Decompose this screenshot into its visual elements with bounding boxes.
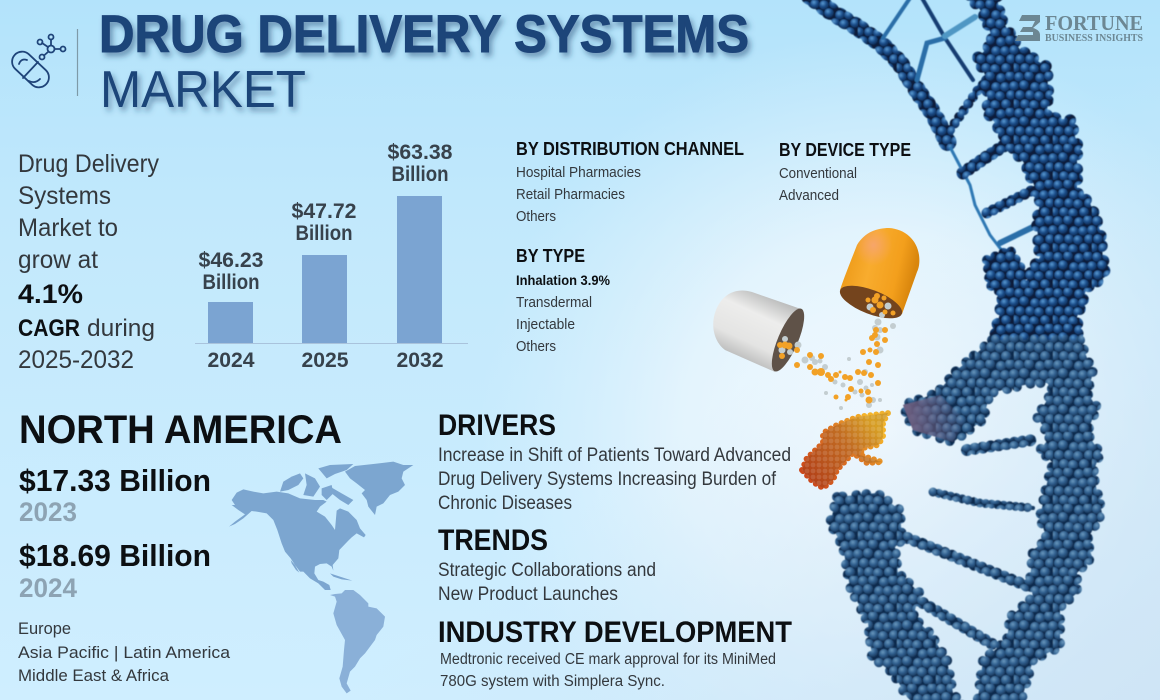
panel: by distribution channel: Retail Pharmacies (516, 187, 625, 203)
panel: North America stats (19, 408, 342, 603)
panel: North America stats: NORTH AMERICA (19, 408, 342, 452)
panel: industry development: Medtronic received CE mark approval for its MiniMed (440, 651, 776, 668)
upper main DNA strand (970, 0, 1105, 350)
panel: drivers: Drug Delivery Systems Increasing Burden of (438, 469, 777, 490)
title: DRUG DELIVERY SYSTEMS (99, 5, 749, 64)
text: CAGR statement: Drug Delivery (18, 150, 159, 178)
bar 2032: Billion (392, 163, 448, 186)
panel: by type (516, 246, 610, 355)
gray granules (778, 302, 896, 410)
upper thin DNA strand (810, 0, 1003, 252)
logo: Fortune Business Insights: BUSINESS INSIGHTS (1045, 33, 1143, 44)
map: the Americas (229, 462, 413, 693)
panel: North America stats: $18.69 Billion (19, 538, 211, 573)
bar 2024: 2024 (208, 349, 255, 372)
bar 2025: $47.72 (292, 200, 356, 223)
panel: industry development: 780G system with Simplera Sync. (440, 673, 665, 690)
header divider (76, 29, 78, 96)
panel: by type: Others (516, 339, 556, 355)
panel: by distribution channel: Hospital Pharmacies (516, 165, 641, 181)
bar 2025: Billion (296, 222, 352, 245)
icon: capsule with molecule (8, 34, 66, 91)
panel: trends: Strategic Collaborations and (438, 560, 656, 581)
bar 2025 (292, 200, 356, 372)
orange spill cluster (802, 413, 888, 488)
text: CAGR statement: Systems (18, 182, 111, 210)
lower left DNA strand (830, 493, 962, 700)
text: CAGR statement: grow at (18, 246, 98, 274)
text: CAGR statement: during (87, 315, 155, 342)
bar 2025: 2025 (302, 349, 349, 372)
logo: Fortune Business Insights: FORTUNE (1045, 11, 1143, 35)
orange capsule half (836, 228, 919, 325)
logo: Fortune Business Insights (1015, 11, 1143, 44)
text: CAGR statement: Market to (18, 214, 118, 242)
bar 2024 (198, 249, 264, 372)
lower DNA rungs (900, 440, 1033, 647)
title (99, 5, 749, 119)
panel: drivers: DRIVERS (438, 409, 556, 442)
text: other regions (18, 619, 231, 685)
illustration: open capsule spilling granules (713, 228, 919, 488)
upper DNA rungs (883, 0, 1033, 243)
text: CAGR statement: CAGR (18, 315, 80, 342)
panel: North America stats: 2024 (19, 573, 77, 603)
panel: by distribution channel: BY DISTRIBUTION CHANNEL (516, 139, 744, 159)
bar 2024: Billion (202, 271, 260, 294)
bar 2032 (388, 141, 453, 372)
title: MARKET (100, 61, 306, 119)
panel: by device type (779, 140, 911, 204)
text: other regions: Middle East & Africa (18, 666, 170, 685)
bar 2024: $46.23 (198, 249, 264, 272)
bar chart: market size (195, 141, 468, 372)
panel: by device type: BY DEVICE TYPE (779, 140, 911, 160)
text: CAGR statement: 4.1% (18, 279, 83, 309)
text: other regions: Europe (18, 619, 71, 638)
panel: industry development: INDUSTRY DEVELOPMENT (438, 616, 792, 649)
panel: industry development (438, 616, 792, 690)
panel: trends: New Product Launches (438, 584, 618, 605)
panel: trends (438, 524, 656, 605)
text: CAGR statement (18, 150, 159, 374)
panel: drivers (438, 409, 791, 514)
panel: by type: Inhalation 3.9% (516, 272, 610, 288)
silver capsule half (713, 291, 810, 375)
panel: by device type: Advanced (779, 188, 839, 204)
panel: drivers: Increase in Shift of Patients Toward Advanced (438, 445, 791, 466)
panel: by type: BY TYPE (516, 246, 585, 266)
panel: by type: Transdermal (516, 295, 592, 311)
panel: by type: Injectable (516, 317, 575, 333)
panel: by distribution channel (516, 139, 744, 225)
orange granules (777, 293, 896, 404)
panel: North America stats: $17.33 Billion (19, 463, 211, 498)
lower main DNA strand (903, 340, 1102, 700)
text: other regions: Asia Pacific | Latin America (18, 643, 231, 662)
panel: by distribution channel: Others (516, 209, 556, 225)
illustration: DNA double helix (810, 0, 1105, 700)
panel: drivers: Chronic Diseases (438, 493, 572, 514)
text: CAGR statement: 2025-2032 (18, 346, 134, 374)
bar 2032: $63.38 (388, 141, 453, 164)
bar 2032: 2032 (396, 349, 444, 372)
panel: trends: TRENDS (438, 524, 548, 557)
panel: by device type: Conventional (779, 166, 857, 182)
panel: North America stats: 2023 (19, 497, 77, 527)
